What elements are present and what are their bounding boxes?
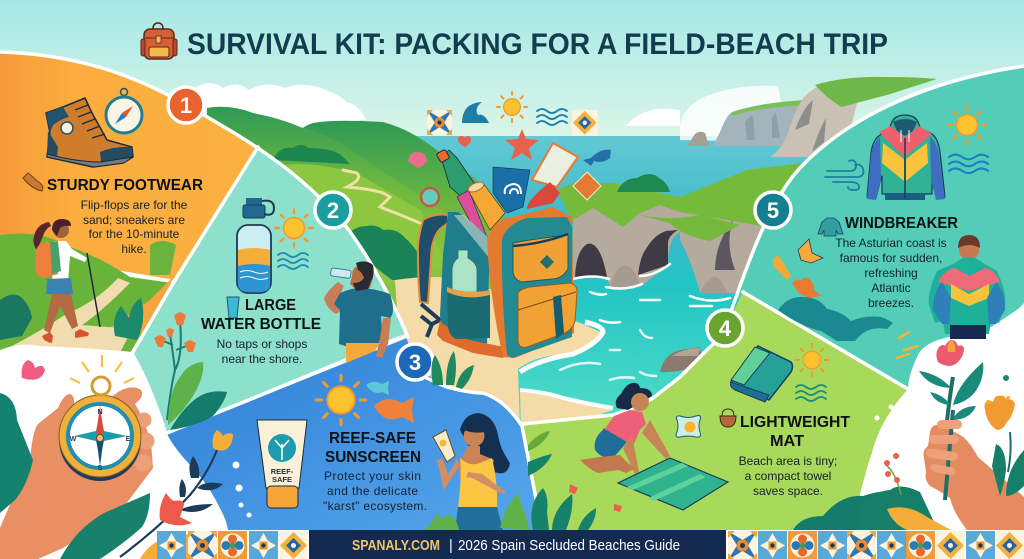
foliage, bottom of panel 4	[528, 431, 933, 530]
title icon: backpack	[141, 23, 177, 59]
badge 3	[397, 344, 433, 380]
icon: towel star	[676, 416, 700, 437]
body	[440, 212, 501, 357]
distant cliffs	[687, 77, 937, 157]
white hand blob, left	[0, 345, 228, 559]
icon: anchor ring	[421, 188, 439, 206]
icon: sun, jacket	[948, 106, 986, 144]
badge 4: 4	[719, 316, 732, 341]
mesh pocket	[447, 287, 490, 339]
text: mat: saves space.	[753, 484, 823, 498]
icon: wave	[462, 102, 489, 123]
icon: starfish	[505, 129, 539, 160]
text: footwear	[81, 198, 188, 256]
hand holding compass	[0, 355, 154, 559]
hand holding compass: E	[126, 436, 131, 443]
foliage, beach front	[431, 351, 474, 389]
icon: shell	[408, 152, 427, 168]
decorative tiles right	[728, 531, 1024, 559]
foliage, bottom right	[858, 375, 1010, 530]
text: windbreaker	[835, 236, 947, 310]
text: sunscreen: "karst" ecosystem.	[323, 499, 427, 513]
text: footwear: sand; sneakers are	[83, 213, 185, 227]
panel 5: windbreaker	[736, 66, 1024, 389]
beach	[395, 277, 702, 429]
badge 2	[315, 192, 351, 228]
icon: sun, mat	[796, 344, 828, 376]
heading: reef-safe sunscreen	[325, 430, 421, 466]
hand holding compass: W	[70, 436, 77, 443]
decorative tiles left	[157, 531, 308, 559]
icon: small fish	[366, 381, 389, 395]
heading: large water bottle	[201, 297, 321, 333]
text: windbreaker: breezes.	[868, 296, 914, 310]
icon: hiking boot	[46, 98, 133, 167]
heading: large water bottle: LARGE	[245, 297, 296, 314]
text: windbreaker: Atlantic	[871, 281, 911, 295]
text: sunscreen	[323, 469, 427, 513]
orange panel 1 background	[0, 52, 258, 280]
heading: reef-safe sunscreen: SUNSCREEN	[325, 449, 421, 466]
hand holding compass: N	[97, 409, 103, 416]
badge 1	[168, 87, 204, 123]
text: water	[217, 337, 307, 366]
hills left of the bay	[200, 107, 513, 317]
foliage, bottom left	[0, 360, 233, 559]
text: windbreaker: famous for sudden,	[840, 251, 942, 265]
icon: tile right	[572, 110, 598, 136]
bottle in pocket	[452, 250, 477, 293]
icon: waves, bottle panel	[278, 253, 308, 269]
footer bar: 2026 Spain Secluded Beaches Guide	[458, 538, 680, 554]
heading: sturdy footwear: STURDY FOOTWEAR	[47, 177, 203, 194]
title: SURVIVAL KIT: PACKING FOR A FIELD-BEACH TRIP	[187, 28, 888, 61]
flower plant, panel 2	[154, 312, 227, 430]
heading: reef-safe sunscreen: REEF-SAFE	[329, 430, 416, 447]
icon: compass	[106, 88, 142, 133]
badge 3: 3	[409, 350, 421, 375]
badge 4	[707, 310, 743, 346]
text: water: near the shore.	[222, 352, 302, 366]
text: sunscreen: Protect your skin	[324, 469, 421, 483]
heading icon: shoe	[23, 173, 43, 191]
heading icon: basket	[720, 409, 736, 427]
foliage, bottom of panel 3	[423, 493, 530, 530]
dots, panel 3	[232, 462, 252, 518]
text: mat: a compact towel	[745, 469, 831, 483]
heading: windbreaker: WINDBREAKER	[845, 215, 958, 232]
white hand blob, right	[860, 303, 1024, 530]
heading: lightweight mat	[740, 414, 850, 450]
woman applying sunscreen	[433, 413, 510, 530]
heading: large water bottle: WATER BOTTLE	[201, 316, 321, 333]
wind-blown items and wave	[773, 239, 918, 358]
backpack	[418, 143, 578, 358]
footer bar	[309, 530, 726, 559]
icon: waves, top	[537, 109, 567, 125]
icon: blue fish	[583, 150, 611, 166]
clouds	[195, 83, 788, 142]
hiker	[33, 219, 100, 343]
text: mat: Beach area is tiny;	[739, 454, 837, 468]
sea	[400, 136, 820, 436]
icon: sun, bottle panel	[275, 209, 313, 247]
heading icon: jacket	[818, 218, 843, 236]
icon: wind	[825, 160, 864, 190]
badge 2: 2	[327, 198, 339, 223]
icon: waves, mat	[796, 385, 826, 401]
badge 1: 1	[180, 93, 192, 118]
icon: waves, jacket	[949, 155, 988, 173]
items sticking out	[441, 150, 474, 199]
footer bar: SPANALY.COM	[352, 538, 440, 554]
panel 4: mat	[522, 292, 908, 530]
striped beach mat	[618, 458, 728, 510]
badge 5	[755, 192, 791, 228]
background sky	[0, 0, 1024, 145]
icon: jacket	[867, 115, 945, 200]
badge 5: 5	[767, 198, 779, 223]
hand holding flower	[919, 340, 1024, 530]
icon: tile	[427, 110, 452, 135]
dots, panel 4	[874, 404, 894, 428]
text: footwear: for the 10-minute	[89, 227, 180, 241]
text: footwear: Flip-flops are for the	[81, 198, 188, 212]
text: mat	[739, 454, 837, 498]
heading: lightweight mat: LIGHTWEIGHT	[740, 414, 850, 431]
icon: sun, top	[497, 92, 527, 122]
icon: sunscreen tube: SAFE	[272, 475, 292, 484]
footer bar: |	[449, 538, 453, 554]
panel 2: water bottle	[133, 149, 406, 432]
hiker landscape	[0, 234, 176, 353]
icon: water bottle	[237, 198, 274, 293]
icon: sunscreen tube: REEF-	[271, 467, 294, 476]
panel 3: sunscreen	[167, 337, 542, 530]
floating icons above backpack	[408, 92, 611, 206]
woman laying mat	[580, 383, 670, 474]
man in windbreaker	[929, 235, 1005, 339]
icon: rolled towel	[730, 346, 792, 402]
text: water: No taps or shops	[217, 337, 307, 351]
icon: heart	[458, 136, 471, 147]
heading icon: cup	[227, 297, 239, 318]
icon: orange fish	[374, 397, 414, 423]
text: sunscreen: and the delicate	[327, 484, 418, 498]
text: footwear: hike.	[121, 242, 147, 256]
strap	[418, 215, 448, 303]
text: windbreaker: refreshing	[864, 266, 918, 280]
icon: diamond tile	[573, 172, 601, 200]
hand holding compass: S	[98, 465, 103, 472]
icon: sunscreen tube	[257, 420, 307, 508]
headland and sea arches	[557, 163, 803, 323]
heading: lightweight mat: MAT	[770, 433, 804, 450]
man drinking	[324, 261, 393, 363]
icon: sun, sunscreen	[316, 375, 366, 425]
text: windbreaker: The Asturian coast is	[835, 236, 947, 250]
